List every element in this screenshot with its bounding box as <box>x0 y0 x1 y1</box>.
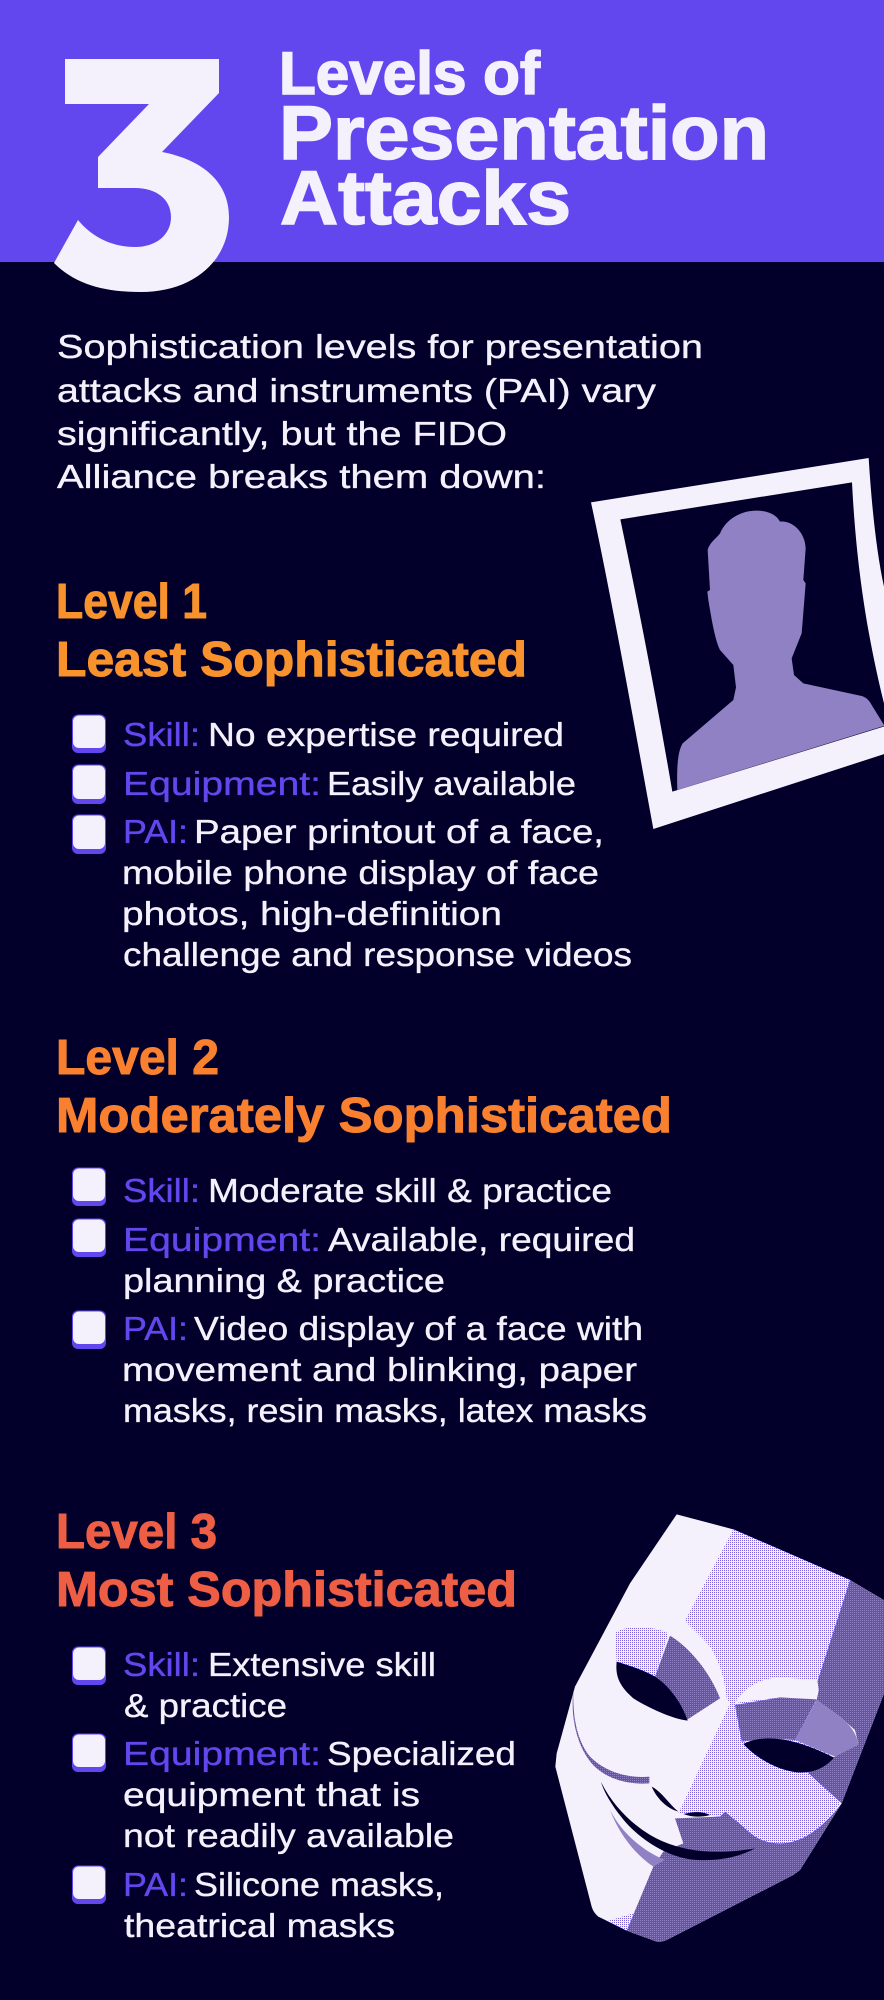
intro paragraph <box>57 328 703 495</box>
item: PAI: PAI: <box>123 813 188 850</box>
intro paragraph: significantly, but the FIDO <box>57 415 507 452</box>
checkbox: equipment <box>72 1218 106 1257</box>
item: PAI: masks, resin masks, latex masks <box>123 1392 647 1429</box>
section: level 2 <box>56 1031 672 1429</box>
checkbox: skill <box>72 714 106 753</box>
item: equipment: Available, required <box>328 1221 635 1258</box>
title: Attacks <box>280 156 571 241</box>
item: PAI: Paper printout of a face, <box>194 813 604 850</box>
item: PAI: movement and blinking, paper <box>122 1351 637 1388</box>
item: PAI: Video display of a face with <box>194 1310 643 1347</box>
checkbox: skill <box>72 1168 106 1206</box>
big numeral 3 <box>54 59 229 292</box>
item: skill: Skill: <box>123 1646 200 1683</box>
item: skill: Extensive skill <box>208 1646 436 1683</box>
heading: level 3: Most Sophisticated <box>56 1563 517 1617</box>
item: equipment: not readily available <box>123 1817 454 1854</box>
item: PAI: mobile phone display of face <box>122 854 599 891</box>
item: PAI: PAI: <box>123 1866 188 1903</box>
title: Presentation <box>279 91 769 176</box>
intro paragraph: Sophistication levels for presentation <box>57 328 703 365</box>
item: skill: Skill: <box>123 716 200 753</box>
intro paragraph: attacks and instruments (PAI) vary <box>57 372 657 409</box>
item: equipment <box>123 765 576 802</box>
item: PAI <box>122 1310 647 1429</box>
item: skill: & practice <box>124 1687 287 1724</box>
heading: level 3 <box>56 1505 517 1617</box>
item: skill: Moderate skill & practice <box>208 1172 612 1209</box>
heading: level 2: Level 2 <box>56 1031 219 1085</box>
header band <box>0 0 884 262</box>
checkbox: skill <box>72 1646 106 1685</box>
checkbox: PAI <box>72 1866 106 1904</box>
item: PAI: Silicone masks, <box>194 1866 444 1903</box>
item: equipment: equipment that is <box>123 1776 420 1813</box>
heading: level 3: Level 3 <box>56 1505 217 1559</box>
item: PAI: PAI: <box>123 1310 188 1347</box>
section: level 3 <box>56 1505 517 1944</box>
item: equipment <box>123 1735 516 1854</box>
item: equipment: Specialized <box>327 1735 516 1772</box>
checkbox: PAI <box>72 1310 106 1349</box>
item: equipment <box>123 1221 635 1299</box>
checkbox: equipment <box>72 1734 106 1772</box>
heading: level 1: Least Sophisticated <box>56 633 527 687</box>
intro paragraph: Alliance breaks them down: <box>57 458 546 495</box>
item: equipment: Equipment: <box>123 1735 321 1772</box>
item: equipment: planning & practice <box>123 1262 445 1299</box>
item: skill: No expertise required <box>208 716 564 753</box>
heading: level 2: Moderately Sophisticated <box>56 1089 672 1143</box>
title <box>279 40 769 241</box>
heading: level 1 <box>56 575 527 687</box>
item: equipment: Easily available <box>327 765 576 802</box>
item: PAI: challenge and response videos <box>123 936 632 973</box>
checkbox: equipment <box>72 764 106 804</box>
checkbox: PAI <box>72 814 106 854</box>
heading: level 2 <box>56 1031 672 1143</box>
illustration: Guy Fawkes mask <box>555 1514 884 1942</box>
item: equipment: Equipment: <box>123 1221 321 1258</box>
item: PAI: theatrical masks <box>124 1907 395 1944</box>
item: skill: Skill: <box>123 1172 200 1209</box>
section: level 1 <box>56 575 632 973</box>
heading: level 1: Level 1 <box>56 575 207 629</box>
title: Levels of <box>279 40 541 107</box>
item: equipment: Equipment: <box>123 765 321 802</box>
item: PAI: photos, high-definition <box>122 895 502 932</box>
illustration: tilted photo with silhouette <box>591 458 884 829</box>
item: PAI <box>122 813 632 973</box>
item: PAI <box>123 1866 444 1944</box>
item: skill <box>123 1646 436 1724</box>
